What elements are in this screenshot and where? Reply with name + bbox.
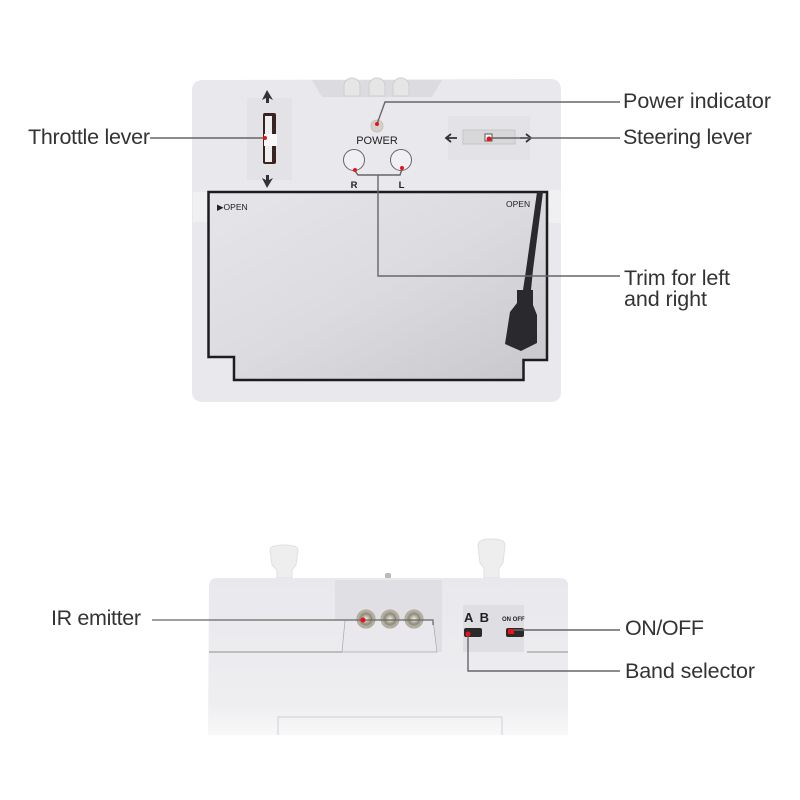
label: IR emitter: IR emitter	[51, 606, 141, 630]
callout: trim line	[353, 166, 620, 276]
icon: antenna cable and plug	[505, 192, 543, 351]
label: steering lever: Steering lever	[623, 125, 752, 149]
icon: throttle arrows	[262, 90, 273, 188]
icon: power LED	[371, 120, 383, 132]
label: trim: and right	[624, 287, 707, 311]
icon: right stick knob	[478, 539, 505, 578]
switch panel	[463, 605, 524, 652]
open label left: ▶OPEN	[217, 202, 248, 212]
icon: throttle slider	[263, 113, 277, 164]
icon: left stick knob	[270, 545, 298, 578]
side latch left	[193, 192, 207, 222]
steering recess	[448, 116, 530, 160]
throttle recess	[247, 98, 292, 180]
body	[208, 578, 568, 735]
label: trim: Trim for left	[624, 266, 730, 290]
callout: power indicator line	[375, 102, 620, 126]
icon: trim button R	[344, 150, 364, 170]
on off label: ON OFF	[502, 617, 525, 623]
central recess	[335, 580, 442, 652]
emitter block	[342, 620, 437, 652]
LED recess	[312, 80, 442, 97]
icon: steering knob	[485, 134, 492, 141]
callout: on/off line	[508, 629, 620, 634]
bottom cover outline	[278, 717, 502, 735]
callout: IR emitter line	[152, 618, 433, 625]
label: throttle lever: Throttle lever	[28, 125, 150, 149]
trim R label: R	[351, 180, 358, 191]
label: on/off: ON/OFF	[625, 616, 704, 640]
battery window	[208, 192, 547, 380]
side latch right	[549, 190, 561, 223]
open label right: OPEN	[506, 199, 530, 209]
label: power indicator: Power indicator	[623, 89, 771, 113]
trim L label: L	[399, 180, 405, 191]
seam line	[209, 651, 568, 653]
callout: throttle lever line	[150, 136, 267, 140]
icon: steering arrows	[446, 134, 531, 142]
steering slot	[463, 130, 515, 144]
label: trim	[624, 266, 730, 311]
icon: IR LEDs	[357, 610, 423, 628]
top device: remote front view	[192, 78, 561, 402]
callout: steering lever line	[486, 136, 620, 142]
device body	[192, 79, 561, 402]
power label: POWER	[356, 135, 398, 147]
icon: band switch	[464, 628, 482, 637]
icon: LED row, top	[344, 78, 409, 96]
callout: band selector line	[466, 632, 620, 671]
icon: power switch	[506, 628, 524, 637]
icon: antenna nub	[385, 573, 391, 579]
A B label: A B	[464, 610, 489, 625]
label: band selector: Band selector	[625, 659, 755, 683]
icon: trim button L	[390, 150, 412, 170]
bottom device: remote top view	[208, 539, 568, 735]
